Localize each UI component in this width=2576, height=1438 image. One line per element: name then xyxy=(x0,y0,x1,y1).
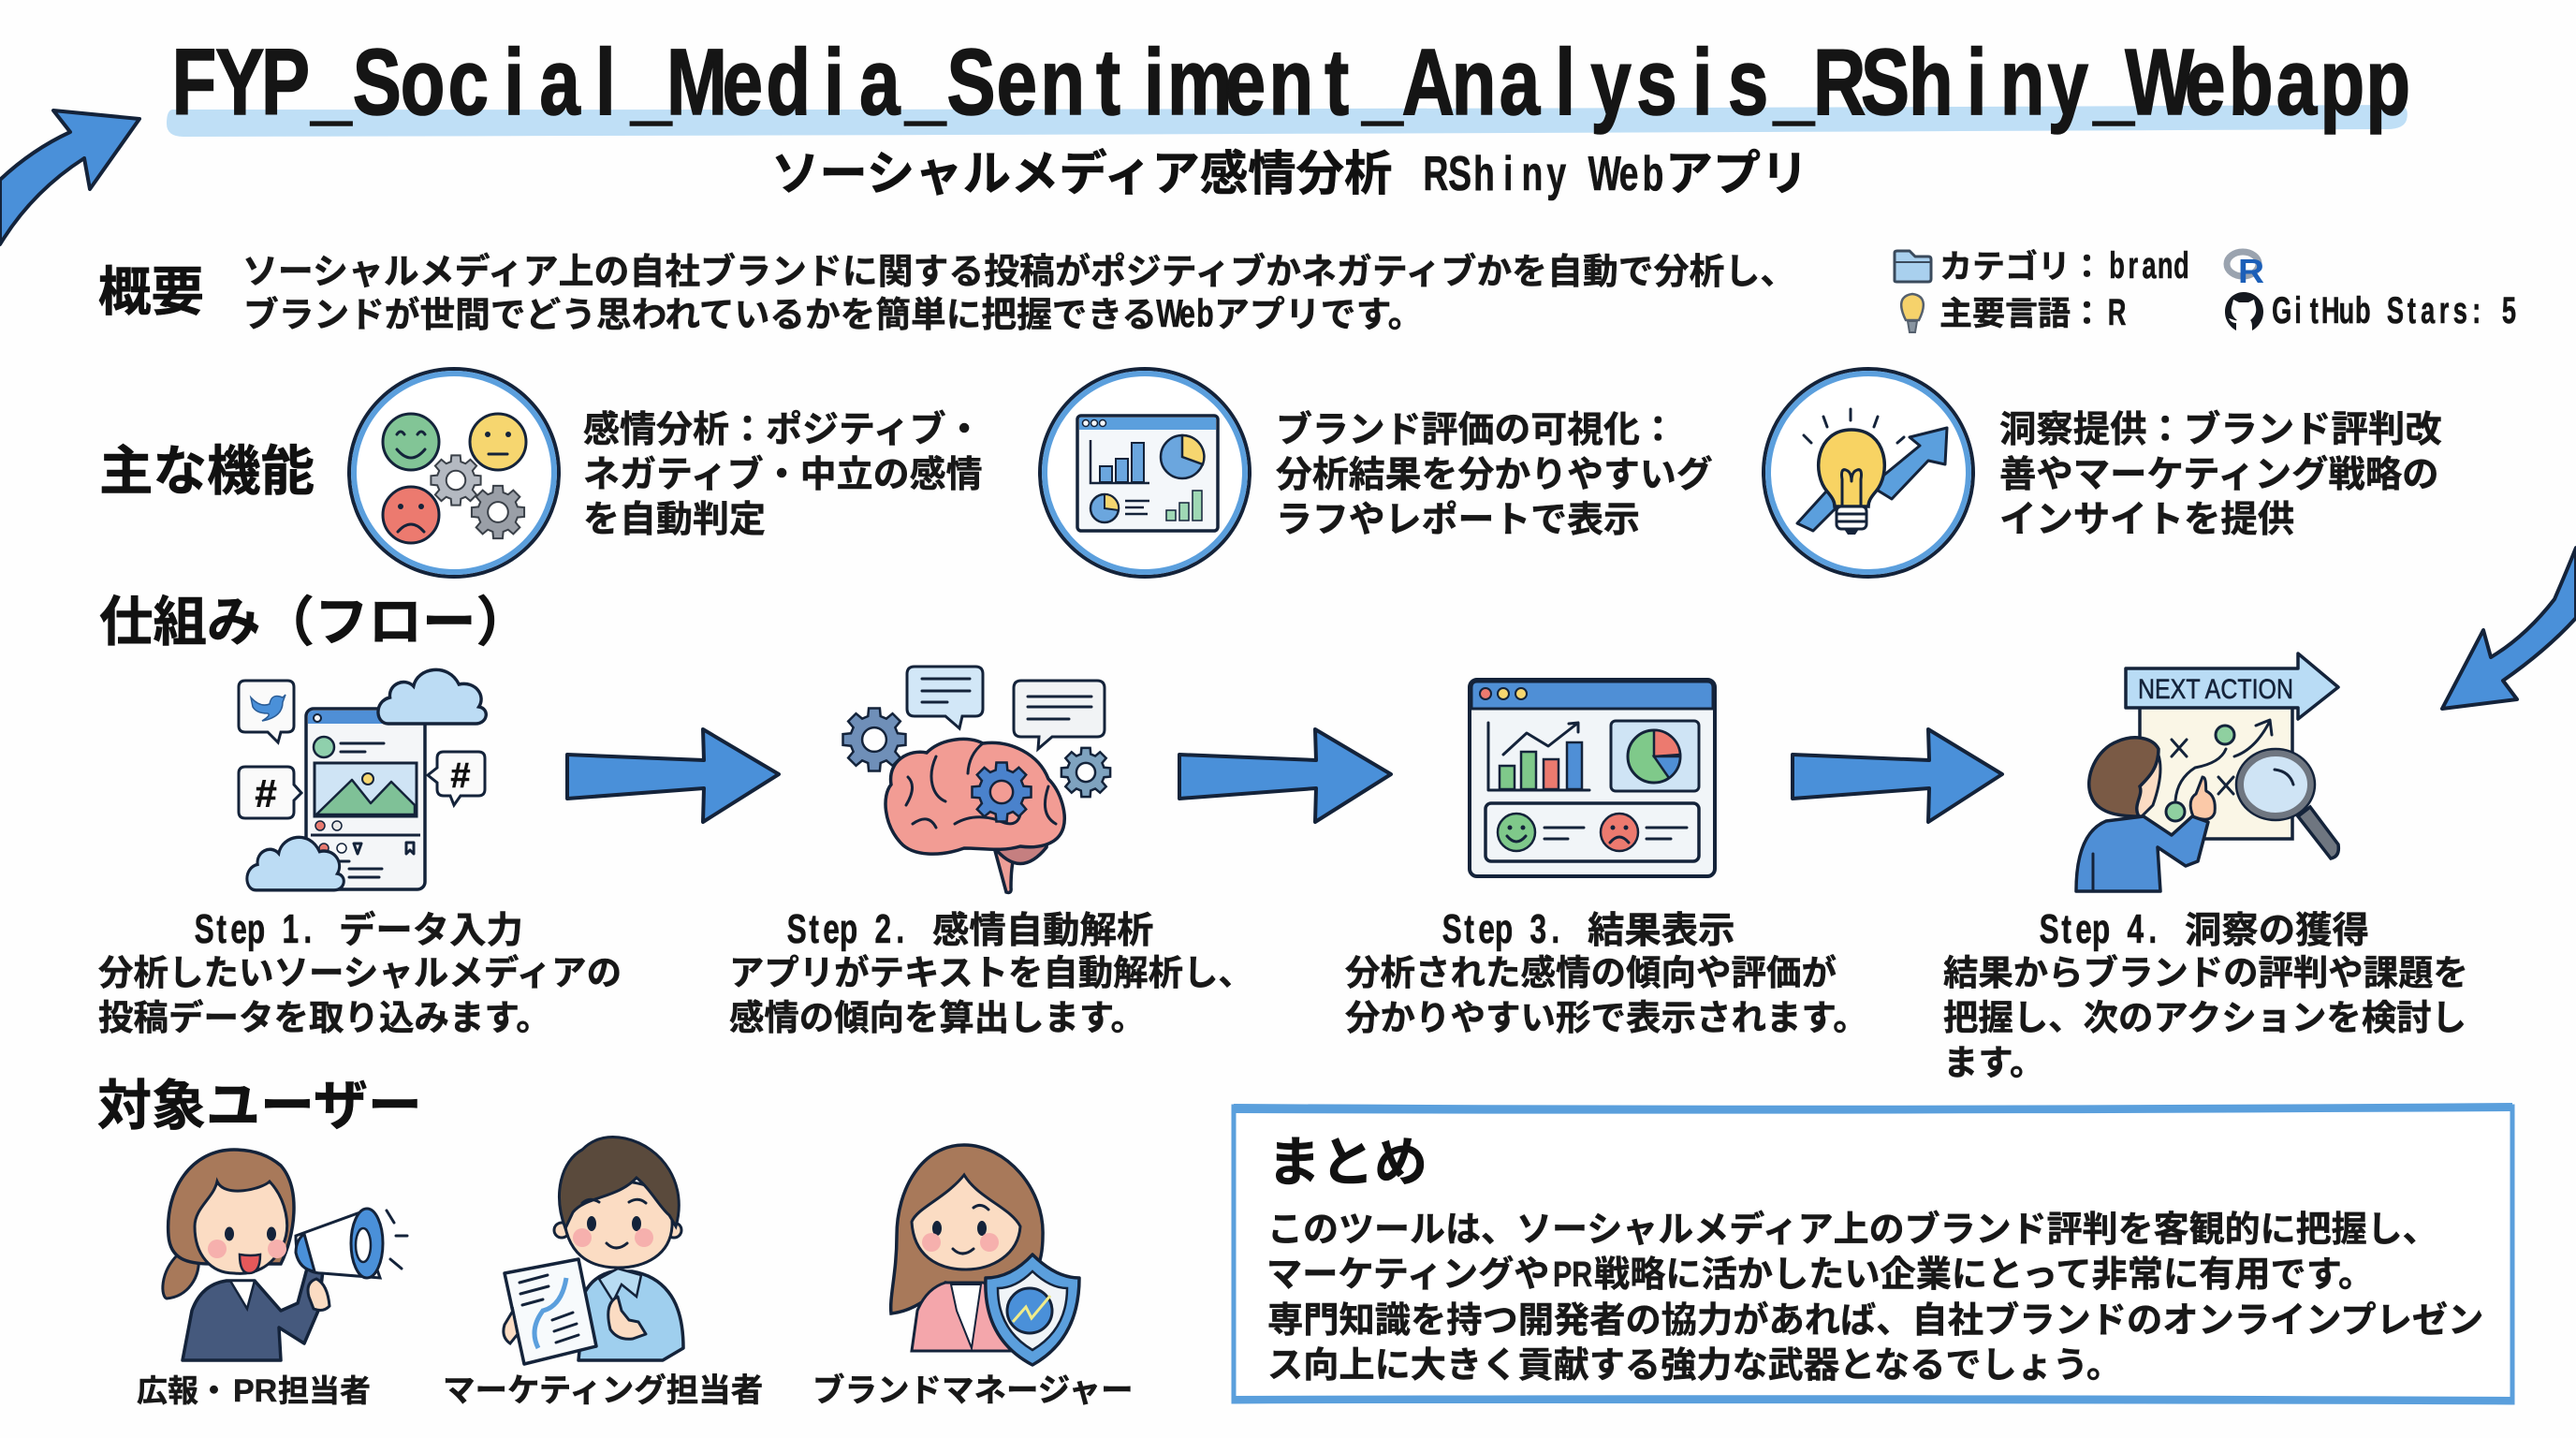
summary text: ス向上に大きく貢献する強力な武器となるでしょう。 xyxy=(1267,1345,2122,1386)
step 1 caption xyxy=(98,906,622,1037)
step 2 caption: アプリがテキストを自動解析し、 xyxy=(729,953,1253,992)
gear in brain xyxy=(972,762,1032,822)
window xyxy=(1470,680,1715,876)
heading: target users: 対象ユーザー xyxy=(97,1076,422,1137)
text: feature 2: 分析結果を分かりやすいグ xyxy=(1276,455,1713,495)
panel: summary xyxy=(1234,1103,2512,1404)
text: category: brand xyxy=(2109,245,2189,286)
summary text: 専門知識を持つ開発者の協力があれば、自社ブランドのオンラインプレゼン xyxy=(1267,1299,2483,1341)
summary text xyxy=(1266,1210,2483,1386)
user 2: marketing person xyxy=(443,1137,763,1409)
cloud bottom xyxy=(247,837,344,890)
text: overview description: アプリです。 xyxy=(1214,296,1424,335)
icon: R logo: R xyxy=(2238,252,2264,290)
next action banner: NEXT ACTION xyxy=(2138,674,2293,705)
step 4 caption: Step 4. xyxy=(2040,906,2157,952)
step 3 caption: 分析された感情の傾向や評価が xyxy=(1345,953,1837,992)
step 1 caption: 分析したいソーシャルメディアの xyxy=(98,953,622,992)
icon circle: light bulb and growth arrow xyxy=(1764,369,1973,577)
text: feature 2 xyxy=(1276,409,1713,540)
user 1: PR person xyxy=(137,1150,407,1409)
sentiment panel xyxy=(1486,803,1699,861)
title text: FYP_Social_Media_Sentiment_Analysis_RShiny_Webapp xyxy=(172,31,2410,135)
icon circle: sentiment faces and gears xyxy=(349,369,559,577)
subtitle: アプリ xyxy=(1665,147,1808,200)
arrow: step 3 to 4 xyxy=(1793,729,2002,822)
text: feature 3: 善やマーケティング戦略の xyxy=(1999,454,2439,495)
step 4 caption: 洞察の獲得 xyxy=(2185,910,2369,951)
twitter bubble xyxy=(239,681,294,742)
label: PR xyxy=(233,1373,277,1409)
feature 1: sentiment analysis xyxy=(349,369,983,577)
summary heading: まとめ xyxy=(1267,1133,1427,1193)
summary text: PR xyxy=(1553,1255,1592,1295)
arrow: right curved xyxy=(2442,548,2576,709)
step 4 icon: next action planning xyxy=(2076,653,2338,891)
text: GitHub stars: GitHub Stars: 5 xyxy=(2272,290,2516,331)
feature 2: brand visualisation xyxy=(1040,369,1713,577)
hashtag bubble left xyxy=(239,767,301,818)
step 3 caption xyxy=(1345,906,1868,1037)
text: overview description: Web xyxy=(1156,291,1214,335)
text: main language: 主要言語： xyxy=(1939,296,2103,332)
step 3 icon: results dashboard xyxy=(1470,680,1715,876)
phone xyxy=(306,709,425,889)
step 2 caption: 感情自動解析 xyxy=(932,910,1153,951)
pie chart panel xyxy=(1611,721,1699,791)
heading: overview: 概要 xyxy=(98,262,204,321)
icon circle: dashboard window xyxy=(1040,369,1250,577)
hashtag bubble left: # xyxy=(255,771,277,815)
label: 広報・ xyxy=(137,1373,229,1408)
text: main language: R xyxy=(2108,292,2126,333)
arrow: top-left curved xyxy=(0,110,139,244)
text: feature 1: を自動判定 xyxy=(583,500,766,540)
cloud top xyxy=(378,669,486,724)
text: feature 1: ネガティブ・中立の感情 xyxy=(583,454,983,495)
subtitle: RShiny Web xyxy=(1423,146,1663,200)
step 3 caption: 結果表示 xyxy=(1588,910,1735,951)
step 1 caption: データ入力 xyxy=(339,909,523,951)
speech bubble 1 xyxy=(907,667,983,728)
step 2 caption: Step 2. xyxy=(787,906,904,952)
illustration: woman with megaphone xyxy=(163,1150,407,1360)
step 4 caption: 結果からブランドの評判や課題を xyxy=(1943,953,2468,992)
title highlight xyxy=(167,105,2408,137)
summary frame xyxy=(1234,1103,2512,1404)
hashtag bubble right: # xyxy=(450,756,471,796)
step 1 icon: social media data xyxy=(239,669,486,890)
text: feature 1 xyxy=(583,409,983,540)
step 2 caption: 感情の傾向を算出します。 xyxy=(729,998,1146,1037)
summary text: 戦略に活かしたい企業にとって非常に有用です。 xyxy=(1594,1255,2374,1295)
arrow: step 2 to 3 xyxy=(1179,729,1391,822)
step 4 caption xyxy=(1943,906,2468,1082)
speech bubble 2 xyxy=(1014,681,1105,749)
hashtag bubble right xyxy=(428,752,485,805)
label xyxy=(137,1373,371,1409)
summary text: マーケティングや xyxy=(1266,1255,1549,1295)
feature 3: insights xyxy=(1764,369,2442,577)
icon: GitHub xyxy=(2225,292,2263,330)
text: overview description xyxy=(242,252,1795,335)
label: ブランドマネージャー xyxy=(812,1372,1134,1409)
step 1 caption: Step 1. xyxy=(195,906,312,952)
arrow: step 1 to 2 xyxy=(567,729,779,822)
text: feature 2: ラフやレポートで表示 xyxy=(1276,500,1640,540)
step 2 icon: brain analysis xyxy=(843,667,1110,892)
label: マーケティング担当者 xyxy=(443,1373,763,1409)
icon: folder xyxy=(1895,251,1931,282)
bar chart xyxy=(1488,723,1589,790)
gear right xyxy=(1061,748,1110,797)
user 3: brand manager xyxy=(812,1145,1134,1409)
step 2 caption xyxy=(729,906,1253,1037)
meta: category and language xyxy=(1895,245,2516,333)
text: feature 2: ブランド評価の可視化： xyxy=(1276,409,1676,450)
brain xyxy=(886,739,1064,892)
text: category xyxy=(1939,245,2189,286)
step 1 caption: 投稿データを取り込みます。 xyxy=(98,998,551,1037)
plan board xyxy=(2140,702,2292,839)
label: 担当者 xyxy=(278,1373,371,1408)
text: overview description: ブランドが世間でどう思われているかを簡単に把握できる xyxy=(243,295,1157,334)
text: category: カテゴリ： xyxy=(1939,248,2103,286)
person xyxy=(2076,738,2215,891)
illustration: woman with shield xyxy=(891,1145,1079,1365)
subtitle: ソーシャルメディア感情分析 xyxy=(771,146,1392,200)
step 3 caption: 分かりやすい形で表示されます。 xyxy=(1345,998,1868,1037)
icon: light bulb xyxy=(1901,294,1924,332)
subtitle xyxy=(771,146,1808,200)
title xyxy=(167,31,2410,137)
illustration: man with report xyxy=(504,1137,683,1364)
text: feature 3 xyxy=(1999,409,2442,540)
text: feature 3: インサイトを提供 xyxy=(1999,499,2294,540)
magnifying glass xyxy=(2236,749,2338,858)
step 4 caption: ます。 xyxy=(1943,1043,2044,1082)
summary text: このツールは、ソーシャルメディア上のブランド評判を客観的に把握し、 xyxy=(1267,1210,2438,1250)
heading: main features: 主な機能 xyxy=(99,442,315,502)
text: overview description: ソーシャルメディア上の自社ブランドに関する投稿がポジティブかネガティブかを自動で分析し、 xyxy=(242,252,1795,292)
next action banner xyxy=(2126,653,2338,719)
icon: R logo xyxy=(2227,252,2264,290)
text: feature 1: 感情分析：ポジティブ・ xyxy=(583,409,983,450)
step 4 caption: 把握し、次のアクションを検討し xyxy=(1943,998,2466,1037)
gear left xyxy=(843,709,905,770)
step 3 caption: Step 3. xyxy=(1442,906,1559,952)
text: feature 3: 洞察提供：ブランド評判改 xyxy=(1999,409,2442,450)
heading: how it works: 仕組み（フロー） xyxy=(99,593,530,653)
